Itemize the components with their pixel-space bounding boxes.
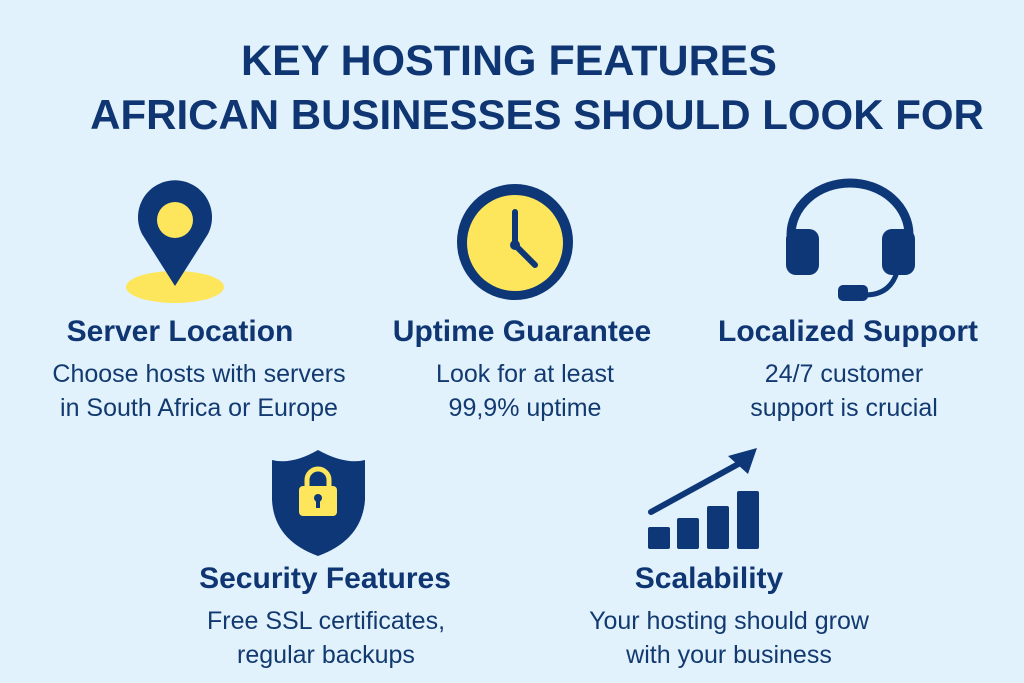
panel: uptime xyxy=(393,315,651,422)
title: KEY HOSTING FEATURES xyxy=(241,37,777,85)
panel: support: Localized Support xyxy=(718,315,978,348)
icon: growth chart xyxy=(648,448,759,549)
icon: headset xyxy=(786,183,915,301)
panel: security xyxy=(199,562,451,669)
icon: shield xyxy=(272,450,365,556)
icon: location pin xyxy=(126,180,224,303)
panel: support: 24/7 customer xyxy=(765,360,923,388)
panel: server location: Choose hosts with servers xyxy=(52,360,346,388)
panel: security: Security Features xyxy=(199,562,451,595)
panel: security: Free SSL certificates, xyxy=(207,607,445,635)
icon: clock xyxy=(457,184,573,300)
panel: uptime: 99,9% uptime xyxy=(449,394,601,422)
panel: scalability: Scalability xyxy=(635,562,783,595)
title: AFRICAN BUSINESSES SHOULD LOOK FOR xyxy=(90,91,984,138)
panel: server location: Server Location xyxy=(67,315,293,348)
panel: uptime: Look for at least xyxy=(436,360,614,388)
panel: server location: in South Africa or Europe xyxy=(60,394,338,422)
panel: server location xyxy=(52,315,346,422)
panel: scalability xyxy=(589,562,869,669)
panel: support xyxy=(718,315,978,422)
title xyxy=(90,37,984,138)
panel: uptime: Uptime Guarantee xyxy=(393,315,651,348)
panel: scalability: with your business xyxy=(626,641,832,669)
panel: support: support is crucial xyxy=(750,394,938,422)
panel: scalability: Your hosting should grow xyxy=(589,607,869,635)
panel: security: regular backups xyxy=(237,641,415,669)
